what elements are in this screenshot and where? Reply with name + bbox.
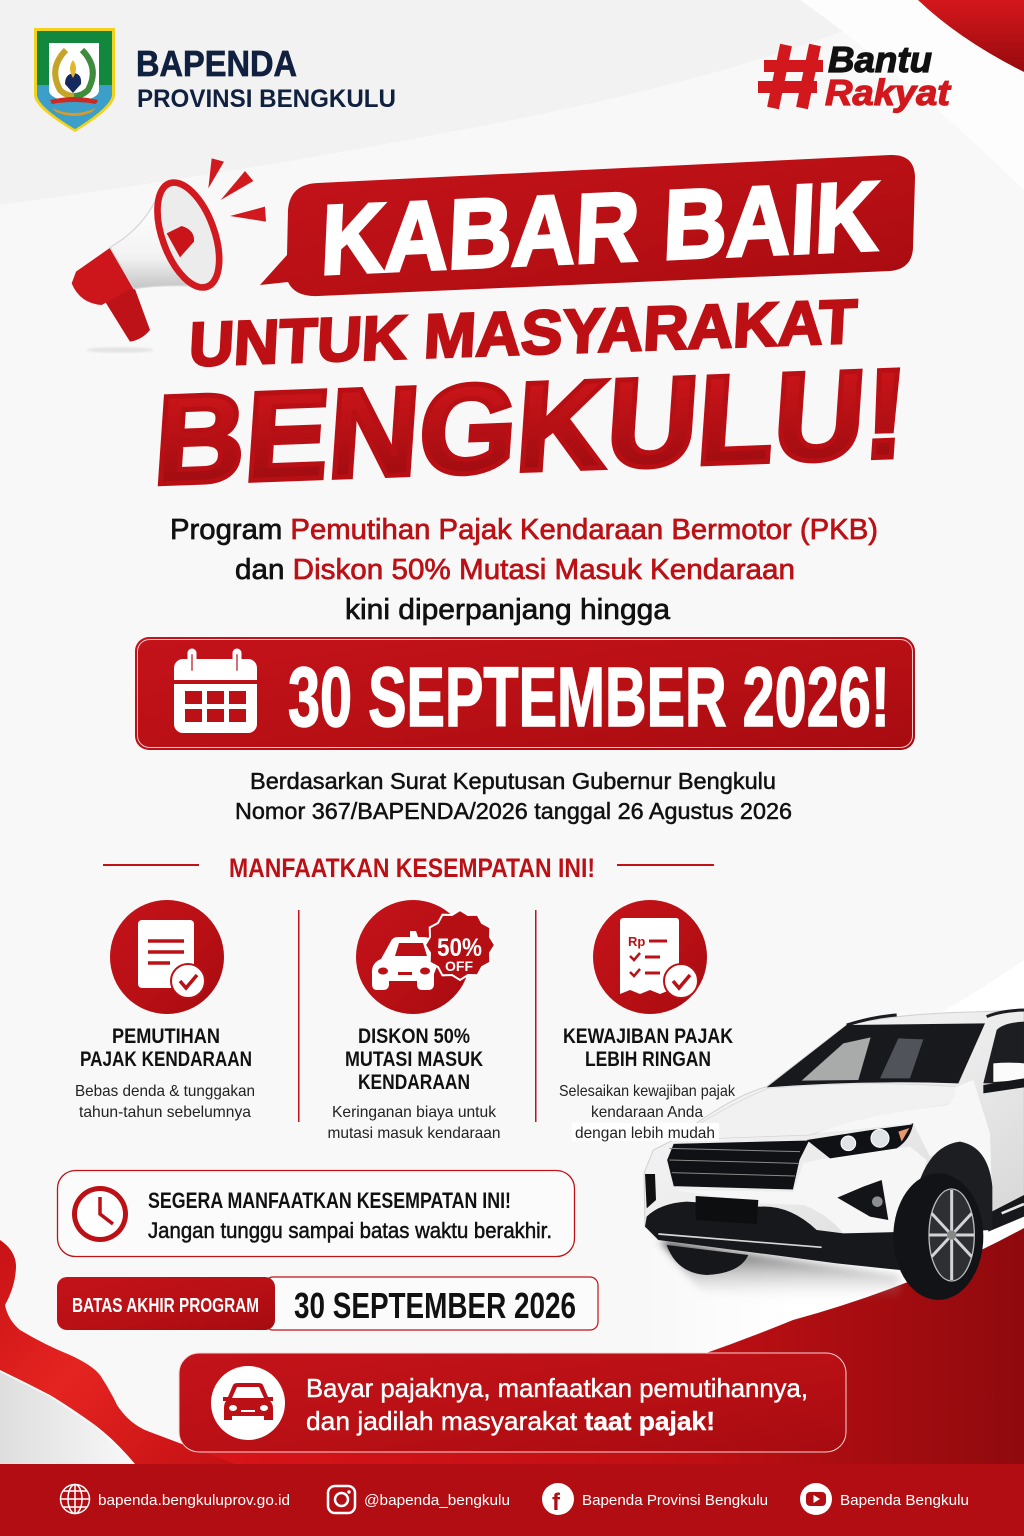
youtube: Bapenda Bengkulu	[840, 1492, 969, 1509]
icon: car with discount badge: 50%	[437, 934, 482, 962]
car body	[644, 1010, 1024, 1267]
benefit 3 heading	[563, 1025, 733, 1071]
benefit 1 heading	[80, 1025, 252, 1071]
side window	[983, 1022, 1024, 1083]
instagram: @bapenda_bengkulu	[364, 1492, 510, 1509]
benefit 1 body: tahun-tahun sebelumnya	[79, 1104, 251, 1121]
left tire	[667, 1245, 748, 1275]
benefit 3 heading: LEBIH RINGAN	[585, 1048, 711, 1071]
lower bumper	[645, 1202, 913, 1270]
facebook: Bapenda Provinsi Bengkulu	[582, 1492, 768, 1509]
headlight	[807, 1123, 913, 1158]
youtube	[800, 1483, 969, 1515]
facebook: f	[552, 1489, 561, 1516]
title: untuk masyarakat: UNTUK MASYARAKAT	[187, 288, 859, 380]
icon: provincial shield	[34, 28, 115, 132]
title: kabar baik: KABAR BAIK	[319, 161, 881, 295]
footer	[0, 1464, 1024, 1536]
logo and agency name	[34, 28, 396, 132]
grille	[667, 1140, 810, 1190]
intro line 2: dan Diskon 50% Mutasi Masuk Kendaraan	[235, 554, 795, 586]
deadline strip	[57, 1277, 598, 1330]
decree text	[235, 768, 792, 824]
windshield	[767, 1023, 985, 1087]
benefit 2 body: mutasi masuk kendaraan	[328, 1125, 500, 1142]
benefit 2 body: Keringanan biaya untuk	[332, 1104, 497, 1121]
bantu: Bantu	[828, 39, 932, 80]
rakyat: Rakyat	[825, 72, 952, 113]
hash	[758, 45, 823, 108]
ribbon left	[0, 1240, 235, 1464]
red flag corner	[918, 0, 1024, 72]
icon: clock	[72, 1186, 128, 1242]
benefit 1 body: Bebas denda & tunggakan	[75, 1083, 255, 1100]
intro line 3: kini diperpanjang hingga	[345, 594, 671, 626]
benefit 3 body: Selesaikan kewajiban pajak	[559, 1083, 736, 1100]
benefit 2 body	[328, 1104, 500, 1142]
facebook	[542, 1483, 768, 1516]
agency subtitle: PROVINSI BENGKULU	[137, 85, 396, 113]
icon: megaphone	[72, 158, 266, 353]
benefit 3 heading: KEWAJIBAN PAJAK	[563, 1025, 733, 1048]
icon: car with discount badge	[356, 900, 495, 1014]
icon: document check	[110, 900, 224, 1014]
deadline date: 30 SEPTEMBER 2026	[294, 1285, 576, 1326]
left fog lamp	[645, 1174, 656, 1208]
intro line 1: Program Pemutihan Pajak Kendaraan Bermotor (PKB)	[170, 514, 878, 546]
benefit 1 body	[75, 1083, 255, 1121]
decree line 2: Nomor 367/BAPENDA/2026 tanggal 26 Agustus 2026	[235, 798, 792, 824]
title: bengkulu: BENGKULU!	[150, 342, 911, 511]
deadline label	[57, 1277, 275, 1330]
slogan line 2: dan jadilah masyarakat taat pajak!	[306, 1406, 715, 1436]
benefit 2 heading: KENDARAAN	[358, 1071, 470, 1094]
date banner	[135, 637, 915, 750]
speech bubble	[260, 155, 915, 296]
reminder text: Jangan tunggu sampai batas waktu berakhir.	[148, 1218, 552, 1243]
reminder heading: SEGERA MANFAATKAN KESEMPATAN INI!	[148, 1188, 511, 1213]
icon: tax receipt: Rp	[628, 934, 645, 949]
benefit 1 heading: PAJAK KENDARAAN	[80, 1048, 252, 1071]
instagram	[328, 1486, 510, 1513]
license plate	[696, 1196, 758, 1224]
red swoosh bottom right	[190, 1228, 1024, 1470]
callout: reminder	[58, 1170, 574, 1256]
icon: tax receipt	[593, 900, 707, 1014]
deadline strip: BATAS AKHIR PROGRAM	[72, 1295, 259, 1317]
website	[60, 1484, 290, 1514]
benefit 1 heading: PEMUTIHAN	[112, 1025, 220, 1048]
section heading: MANFAATKAN KESEMPATAN INI!	[229, 853, 595, 883]
wheel arch	[909, 1142, 992, 1233]
side sill	[988, 1195, 1024, 1232]
front tire and rim	[893, 1173, 983, 1300]
right fog vent	[837, 1180, 888, 1220]
benefit 2 heading	[345, 1025, 483, 1094]
icon: car	[211, 1366, 285, 1440]
slogan banner	[179, 1353, 846, 1452]
benefit 2 heading: MUTASI MASUK	[345, 1048, 483, 1071]
icon: car with discount badge: OFF	[445, 958, 473, 974]
dividers	[298, 910, 536, 1122]
decree line 1: Berdasarkan Surat Keputusan Gubernur Bengkulu	[250, 768, 776, 794]
intro text	[170, 514, 878, 626]
benefit 3 body	[559, 1083, 736, 1142]
slogan line 1: Bayar pajaknya, manfaatkan pemutihannya,	[306, 1373, 808, 1403]
benefit 2	[328, 900, 500, 1142]
icon: calendar	[174, 653, 257, 733]
website: bapenda.bengkuluprov.go.id	[98, 1492, 290, 1509]
car	[644, 1010, 1024, 1300]
benefit 2 heading: DISKON 50%	[358, 1025, 470, 1048]
benefit 3 body: kendaraan Anda	[591, 1104, 703, 1121]
hashtag logo	[758, 39, 952, 113]
benefit 1	[75, 900, 255, 1121]
benefit 3 body: dengan lebih mudah	[575, 1125, 715, 1142]
benefit 3	[559, 900, 736, 1142]
agency name: BAPENDA	[136, 43, 297, 84]
car shadow	[660, 1240, 900, 1299]
